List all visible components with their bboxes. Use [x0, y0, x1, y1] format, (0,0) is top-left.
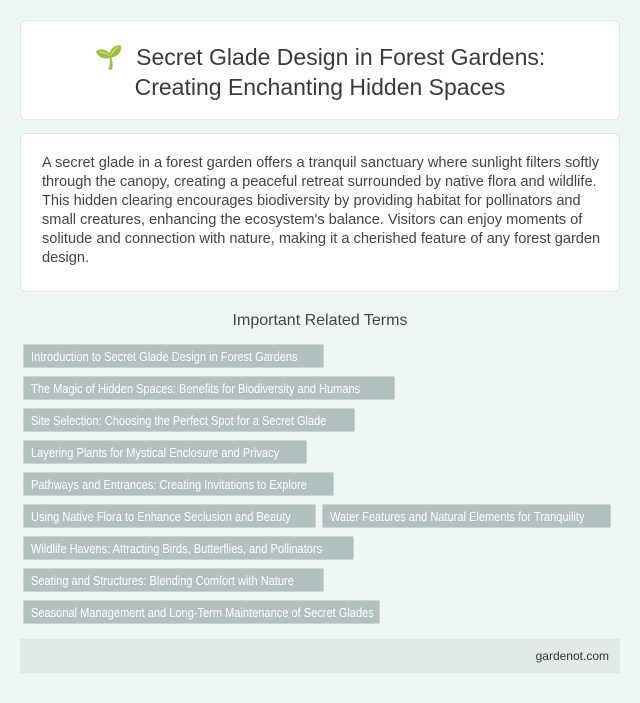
title	[95, 44, 545, 100]
tag	[23, 568, 324, 592]
tag	[23, 408, 355, 432]
title: 🌱 Secret Glade Design in Forest Gardens:	[95, 44, 545, 70]
tag: Wildlife Havens: Attracting Birds, Butterflies, and Pollinators	[31, 541, 322, 556]
tag: Seating and Structures: Blending Comfort with Nature	[31, 573, 294, 588]
tag list	[23, 344, 611, 624]
related terms heading: Important Related Terms	[233, 312, 407, 329]
tag	[23, 440, 307, 464]
description text: A secret glade in a forest garden offers a tranquil sanctuary where sunlight filters softly through the canopy, creating a peaceful retreat surrounded by native flora and wildlife. This hidden clearing encourages biodiversity by providing habitat for pollinators and small creatures, enhancing the ecosystem's balance. Visitors can enjoy moments of solitude and connection with nature, making it a cherished feature of any forest garden design.	[42, 155, 600, 266]
tag	[23, 504, 316, 528]
tag: Site Selection: Choosing the Perfect Spot for a Secret Glade	[31, 413, 326, 428]
tag	[23, 600, 380, 624]
tag	[322, 504, 611, 528]
tag: Water Features and Natural Elements for Tranquility	[330, 509, 584, 524]
tag: Using Native Flora to Enhance Seclusion and Beauty	[31, 509, 291, 524]
tag	[23, 376, 395, 400]
title panel	[20, 20, 620, 120]
tag	[23, 344, 324, 368]
tag: Introduction to Secret Glade Design in Forest Gardens	[31, 349, 298, 364]
title: Creating Enchanting Hidden Spaces	[135, 74, 505, 100]
tag: The Magic of Hidden Spaces: Benefits for Biodiversity and Humans	[31, 381, 360, 396]
tag: Pathways and Entrances: Creating Invitations to Explore	[31, 477, 307, 492]
tag: Layering Plants for Mystical Enclosure and Privacy	[31, 445, 279, 460]
footer source: gardenot.com	[536, 649, 609, 663]
tag	[23, 536, 354, 560]
tag: Seasonal Management and Long-Term Maintenance of Secret Glades	[31, 605, 374, 620]
footer	[20, 639, 620, 673]
description panel	[20, 133, 620, 292]
tag	[23, 472, 334, 496]
